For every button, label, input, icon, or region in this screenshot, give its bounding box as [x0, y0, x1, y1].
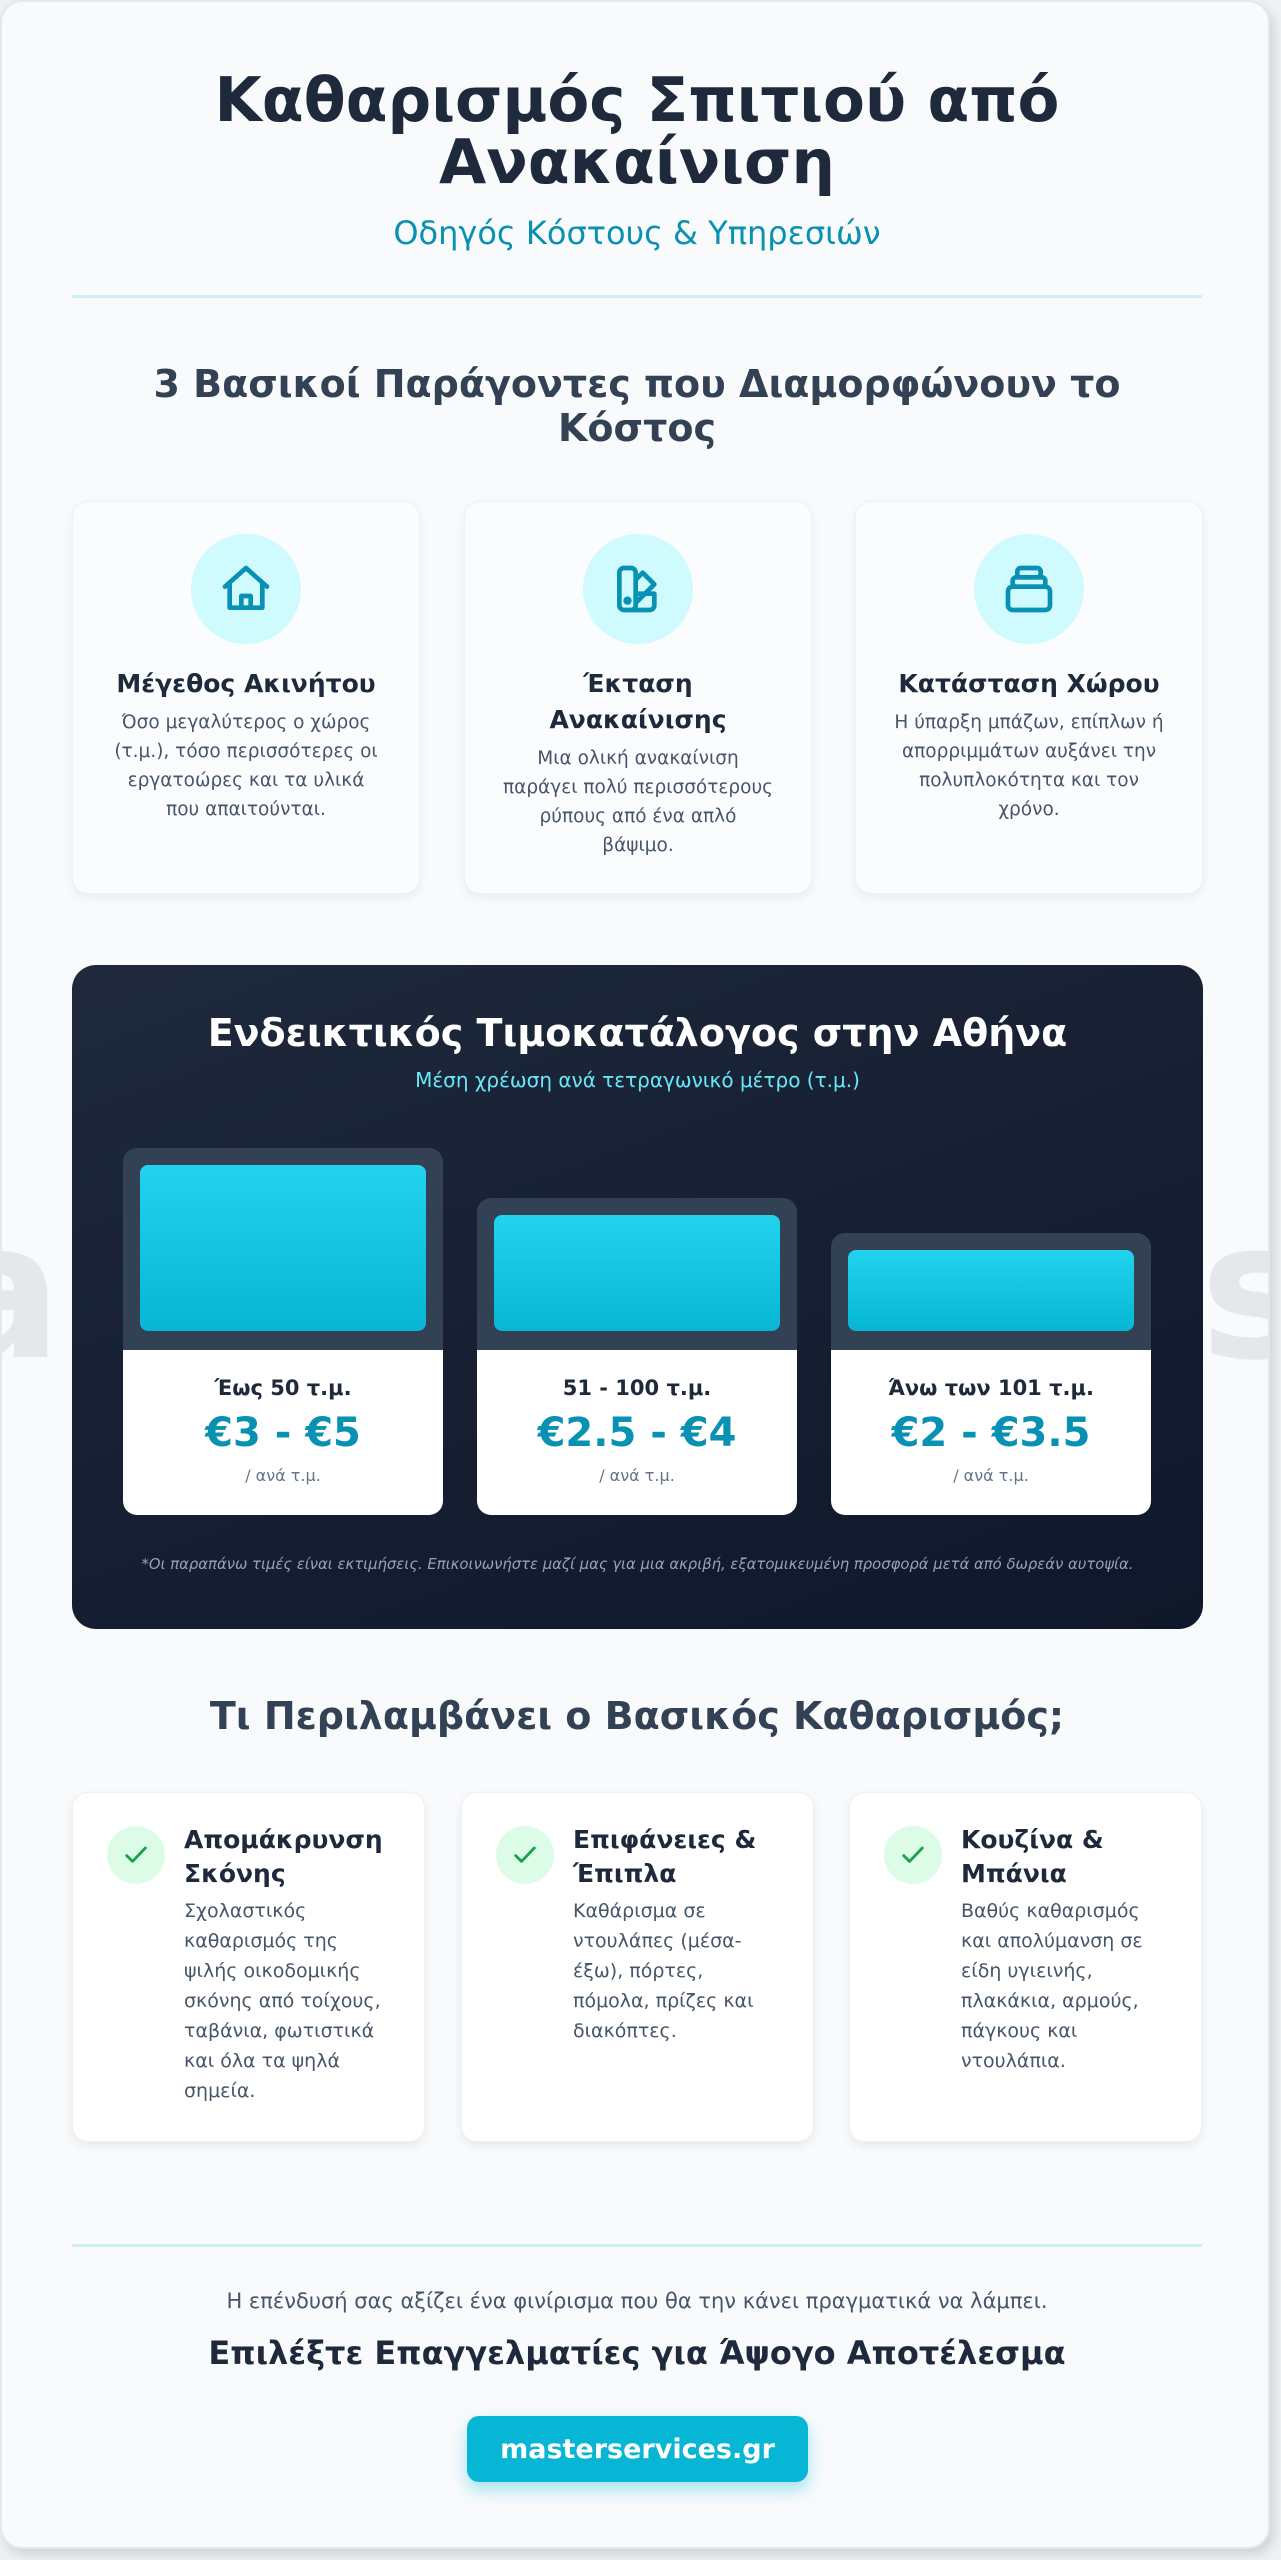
closing heading: Επιλέξτε Επαγγελματίες για Άψογο Αποτέλεσμα — [208, 2334, 1066, 2372]
card: dust removal — [72, 1792, 425, 2142]
heading: factors: 3 Βασικοί Παράγοντες που Διαμορφώνουν το — [153, 362, 1121, 406]
card: surfaces: Επιφάνειες & Έπιπλα — [573, 1825, 756, 1888]
title: Καθαρισμός Σπιτιού από — [215, 65, 1059, 136]
card: dust removal: Σχολαστικός καθαρισμός της ψιλής οικοδομικής σκόνης από τοίχους, ταβάνια, φωτιστικά και όλα τα ψηλά σημεία. — [184, 1900, 381, 2102]
card: surfaces — [461, 1792, 814, 2142]
price card: 51-100 — [477, 1198, 797, 1515]
card: property size: Όσο μεγαλύτερος ο χώρος (τ.μ.), τόσο περισσότερες οι εργατοώρες και τα υλικά που απαιτούνται. — [114, 712, 378, 820]
closing text: Η επένδυσή σας αξίζει ένα φινίρισμα που θα την κάνει πραγματικά να λάμπει. — [226, 2289, 1048, 2313]
icon: check — [884, 1826, 942, 1884]
price card: up to 50: / ανά τ.μ. — [245, 1466, 321, 1485]
price card: up to 50 — [123, 1148, 443, 1515]
icon: check — [107, 1826, 165, 1884]
panel subtitle: Μέση χρέωση ανά τετραγωνικό μέτρο (τ.μ.) — [415, 1068, 860, 1092]
title: Ανακαίνιση — [439, 127, 835, 198]
panel: price list — [72, 965, 1203, 1629]
price card: 51-100: 51 - 100 τ.μ. — [563, 1376, 711, 1400]
button: masterservices.gr — [500, 2434, 775, 2464]
title — [215, 65, 1059, 198]
icon: house — [191, 534, 301, 644]
card: renovation extent: Έκταση Ανακαίνισης — [549, 669, 727, 734]
price card: 51-100: / ανά τ.μ. — [599, 1466, 675, 1485]
button — [467, 2416, 808, 2482]
card: space condition — [855, 501, 1203, 894]
price card: over 101 — [831, 1233, 1151, 1515]
card: kitchen & bathrooms: Βαθύς καθαρισμός και απολύμανση σε είδη υγιεινής, πλακάκια, αρμούς, πάγκους και ντουλάπια. — [961, 1900, 1143, 2072]
card: kitchen & bathrooms: Κουζίνα & Μπάνια — [961, 1825, 1104, 1888]
price card: 51-100: €2.5 - €4 — [538, 1410, 736, 1456]
card: property size — [72, 501, 420, 894]
card: kitchen & bathrooms — [849, 1792, 1202, 2142]
price card: over 101: / ανά τ.μ. — [953, 1466, 1029, 1485]
subtitle: Οδηγός Κόστους & Υπηρεσιών — [393, 214, 881, 252]
price card: over 101: €2 - €3.5 — [892, 1410, 1090, 1456]
icon: swatch — [583, 534, 693, 644]
heading: factors: Κόστος — [558, 406, 716, 450]
card: renovation extent: Μια ολική ανακαίνιση παράγει πολύ περισσότερους ρύπους από ένα απλό βάψιμο. — [503, 748, 773, 856]
panel title: Ενδεικτικός Τιμοκατάλογος στην Αθήνα — [208, 1011, 1067, 1055]
heading: factors — [153, 362, 1121, 450]
card: property size: Μέγεθος Ακινήτου — [116, 669, 376, 698]
price card: up to 50: Έως 50 τ.μ. — [214, 1376, 352, 1400]
price card: up to 50: €3 - €5 — [205, 1410, 361, 1456]
footnote: *Οι παραπάνω τιμές είναι εκτιμήσεις. Επικοινωνήστε μαζί μας για μια ακριβή, εξατομικευμένη προσφορά μετά από δωρεάν αυτοψία. — [141, 1556, 1134, 1573]
heading: includes: Τι Περιλαμβάνει ο Βασικός Καθαρισμός; — [210, 1694, 1064, 1738]
card: renovation extent — [464, 501, 812, 894]
card: space condition: Η ύπαρξη μπάζων, επίπλων ή απορριμμάτων αυξάνει την πολυπλοκότητα και τον χρόνο. — [894, 712, 1164, 820]
icon: stacked boxes — [974, 534, 1084, 644]
price card: over 101: Άνω των 101 τ.μ. — [888, 1376, 1094, 1400]
icon: check — [496, 1826, 554, 1884]
card: space condition: Κατάσταση Χώρου — [898, 669, 1160, 698]
card: surfaces: Καθάρισμα σε ντουλάπες (μέσα-έξω), πόρτες, πόμολα, πρίζες και διακόπτες. — [573, 1900, 754, 2042]
card: dust removal: Απομάκρυνση Σκόνης — [184, 1825, 383, 1888]
